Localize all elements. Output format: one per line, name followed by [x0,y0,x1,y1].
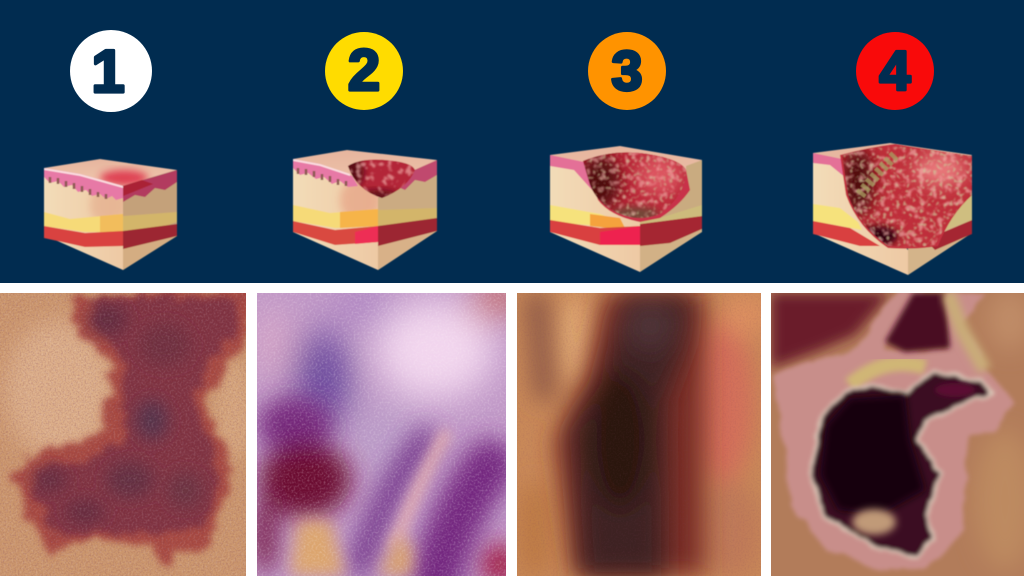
skin diagram: stage 1 [44,159,177,270]
badge: stage 3: 3 [611,39,643,102]
badge: stage 4 [856,32,934,110]
wound rim [772,288,1014,570]
photo: stage 3 wound [517,293,761,576]
badge: stage 3 [588,32,666,110]
photo: stage 4 wound [771,293,1024,576]
header band [0,0,1024,283]
badge: stage 4: 4 [879,39,911,102]
skin diagram: stage 3 [550,145,702,272]
skin diagram: stage 2 [293,150,437,270]
photo: stage 1 bruise [0,293,246,576]
badge: stage 2: 2 [348,38,380,103]
skin diagram: stage 4 [813,140,975,275]
photo: stage 2 bruise [257,293,506,576]
badge: stage 1: 1 [91,38,125,105]
badge: stage 1 [70,30,152,112]
wound cavity [811,373,991,557]
badge: stage 2 [325,32,403,110]
